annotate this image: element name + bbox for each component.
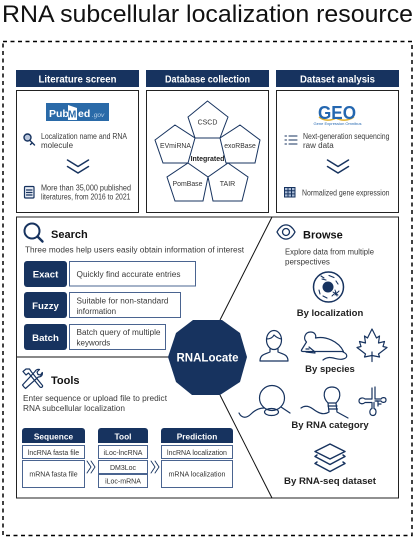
mode: batch: keywords bbox=[76, 338, 110, 348]
column: tool: Tool bbox=[115, 432, 131, 442]
pentagon: CSCD: CSCD bbox=[198, 120, 217, 126]
heading: dataset analysis: Dataset analysis bbox=[300, 74, 375, 86]
arrow: chevron bbox=[87, 461, 95, 473]
text: localization: molecule bbox=[41, 141, 74, 150]
icon: tools bbox=[22, 369, 43, 388]
icon: list bbox=[285, 136, 297, 144]
text: tools intro: Enter sequence or upload file to predict bbox=[23, 394, 168, 403]
mode: fuzzy: Suitable for non-standard bbox=[76, 296, 168, 306]
text: raw data bbox=[303, 132, 390, 150]
column: sequence bbox=[22, 428, 85, 488]
pentagon: TAIR: TAIR bbox=[220, 181, 235, 188]
column: prediction: mRNA localization bbox=[169, 472, 226, 478]
text: browse intro: Explore data from multiple bbox=[285, 248, 375, 256]
icon: leaf bbox=[357, 329, 387, 362]
mode: exact: Quickly find accurate entries bbox=[76, 270, 180, 279]
label: by species: By species bbox=[305, 364, 355, 375]
heading: search: Search bbox=[51, 229, 88, 241]
icon: layers bbox=[315, 444, 345, 472]
mode: fuzzy: information bbox=[76, 307, 116, 316]
text: browse intro: perspectives bbox=[285, 258, 330, 266]
column: tool: DM3Loc bbox=[110, 465, 137, 472]
text: raw data: Next-generation sequencing bbox=[303, 132, 390, 141]
panel: main modules bbox=[16, 217, 398, 498]
text: normalized: Normalized gene expression bbox=[302, 188, 390, 198]
centre badge: RNALocate bbox=[168, 320, 247, 395]
icon: hairpin RNA bbox=[301, 387, 348, 418]
label: by RNA-seq dataset: By RNA-seq dataset bbox=[284, 476, 377, 487]
column: prediction bbox=[161, 428, 233, 488]
column: prediction: Prediction bbox=[177, 432, 217, 442]
panel: dataset analysis bbox=[276, 70, 399, 212]
pentagon: EVmiRNA: EVmiRNA bbox=[160, 143, 191, 150]
divider lines bbox=[17, 217, 272, 498]
icon: cell bbox=[314, 272, 344, 302]
panel: literature screen bbox=[16, 70, 139, 212]
pentagon: EVmiRNA bbox=[155, 125, 195, 163]
heading: literature screen: Literature screen bbox=[38, 74, 116, 86]
mode: batch bbox=[24, 324, 166, 350]
icon: table bbox=[284, 188, 295, 197]
heading: browse: Browse bbox=[303, 230, 343, 242]
title: RNA subcellular localization resource bbox=[2, 1, 413, 28]
pentagon: PomBase: PomBase bbox=[172, 181, 203, 188]
text: browse intro bbox=[285, 248, 375, 266]
icon: tRNA bbox=[359, 387, 386, 416]
text: literature count: More than 35,000 published bbox=[41, 184, 131, 192]
mode: exact bbox=[24, 261, 196, 287]
heading: tools: Tools bbox=[51, 375, 80, 387]
icon: lncRNA loop bbox=[239, 386, 290, 417]
icon: eye bbox=[277, 225, 295, 239]
column: sequence: mRNA fasta file bbox=[29, 472, 78, 478]
text: raw data: raw data bbox=[303, 141, 334, 150]
panel: database collection bbox=[146, 70, 269, 212]
logo: GEO: GEO bbox=[318, 103, 356, 123]
icon: human bbox=[260, 330, 288, 361]
mode: batch: Batch query of multiple bbox=[76, 328, 161, 337]
section: browse bbox=[239, 225, 387, 487]
label: integrated: Integrated bbox=[191, 156, 224, 163]
icon: mouse bbox=[301, 332, 347, 360]
pentagon: exoRBase bbox=[220, 125, 260, 163]
heading: literature screen bbox=[16, 70, 139, 87]
heading: dataset analysis bbox=[276, 70, 399, 87]
column: tool bbox=[98, 428, 148, 488]
label: by RNA category: By RNA category bbox=[291, 420, 369, 431]
text: tools intro bbox=[23, 394, 168, 413]
text: literature count: literatures, from 2016 to 2021 bbox=[41, 192, 131, 202]
mode: fuzzy: Fuzzy bbox=[32, 301, 59, 312]
column: tool: iLoc-mRNA bbox=[105, 478, 141, 486]
arrow: chevrons down bbox=[328, 160, 348, 173]
label: by localization: By localization bbox=[297, 308, 363, 319]
arrow: chevron bbox=[151, 461, 159, 473]
logo: GEO: Gene Expression Omnibus bbox=[314, 122, 362, 126]
pentagon: TAIR bbox=[208, 163, 248, 201]
text: tools intro: RNA subcellular localization bbox=[23, 404, 125, 413]
centre badge: RNALocate: RNALocate bbox=[177, 352, 238, 364]
arrow: chevrons down bbox=[68, 160, 88, 173]
icon: document bbox=[24, 186, 34, 198]
icon: key search bbox=[24, 134, 34, 145]
logo: PubMed: Pub bbox=[49, 108, 69, 120]
column: sequence: Sequence bbox=[34, 432, 73, 442]
column: prediction: lncRNA localization bbox=[167, 450, 227, 457]
pentagon: PomBase bbox=[167, 163, 208, 201]
heading: database collection: Database collection bbox=[165, 74, 250, 86]
column: sequence: lncRNA fasta file bbox=[28, 450, 79, 457]
logo: PubMed: ed bbox=[78, 108, 90, 120]
column: tool: iLoc-lncRNA bbox=[104, 450, 143, 457]
logo: PubMed: .gov bbox=[92, 112, 105, 119]
pentagon: CSCD bbox=[188, 101, 228, 138]
pentagon: exoRBase: exoRBase bbox=[224, 143, 256, 150]
text: search intro: Three modes help users easily obtain information of interest bbox=[25, 246, 245, 254]
section: search bbox=[24, 224, 245, 350]
heading: database collection bbox=[146, 70, 269, 87]
icon: magnifier bbox=[24, 224, 42, 242]
logo: PubMed bbox=[46, 103, 109, 121]
mode: fuzzy bbox=[24, 292, 180, 318]
logo: PubMed: M bbox=[68, 110, 76, 120]
text: literature count bbox=[41, 184, 131, 202]
mode: batch: Batch bbox=[32, 333, 59, 344]
section: tools bbox=[22, 369, 233, 488]
text: localization bbox=[41, 132, 128, 150]
text: localization: Localization name and RNA bbox=[41, 132, 128, 141]
mode: exact: Exact bbox=[33, 270, 59, 280]
